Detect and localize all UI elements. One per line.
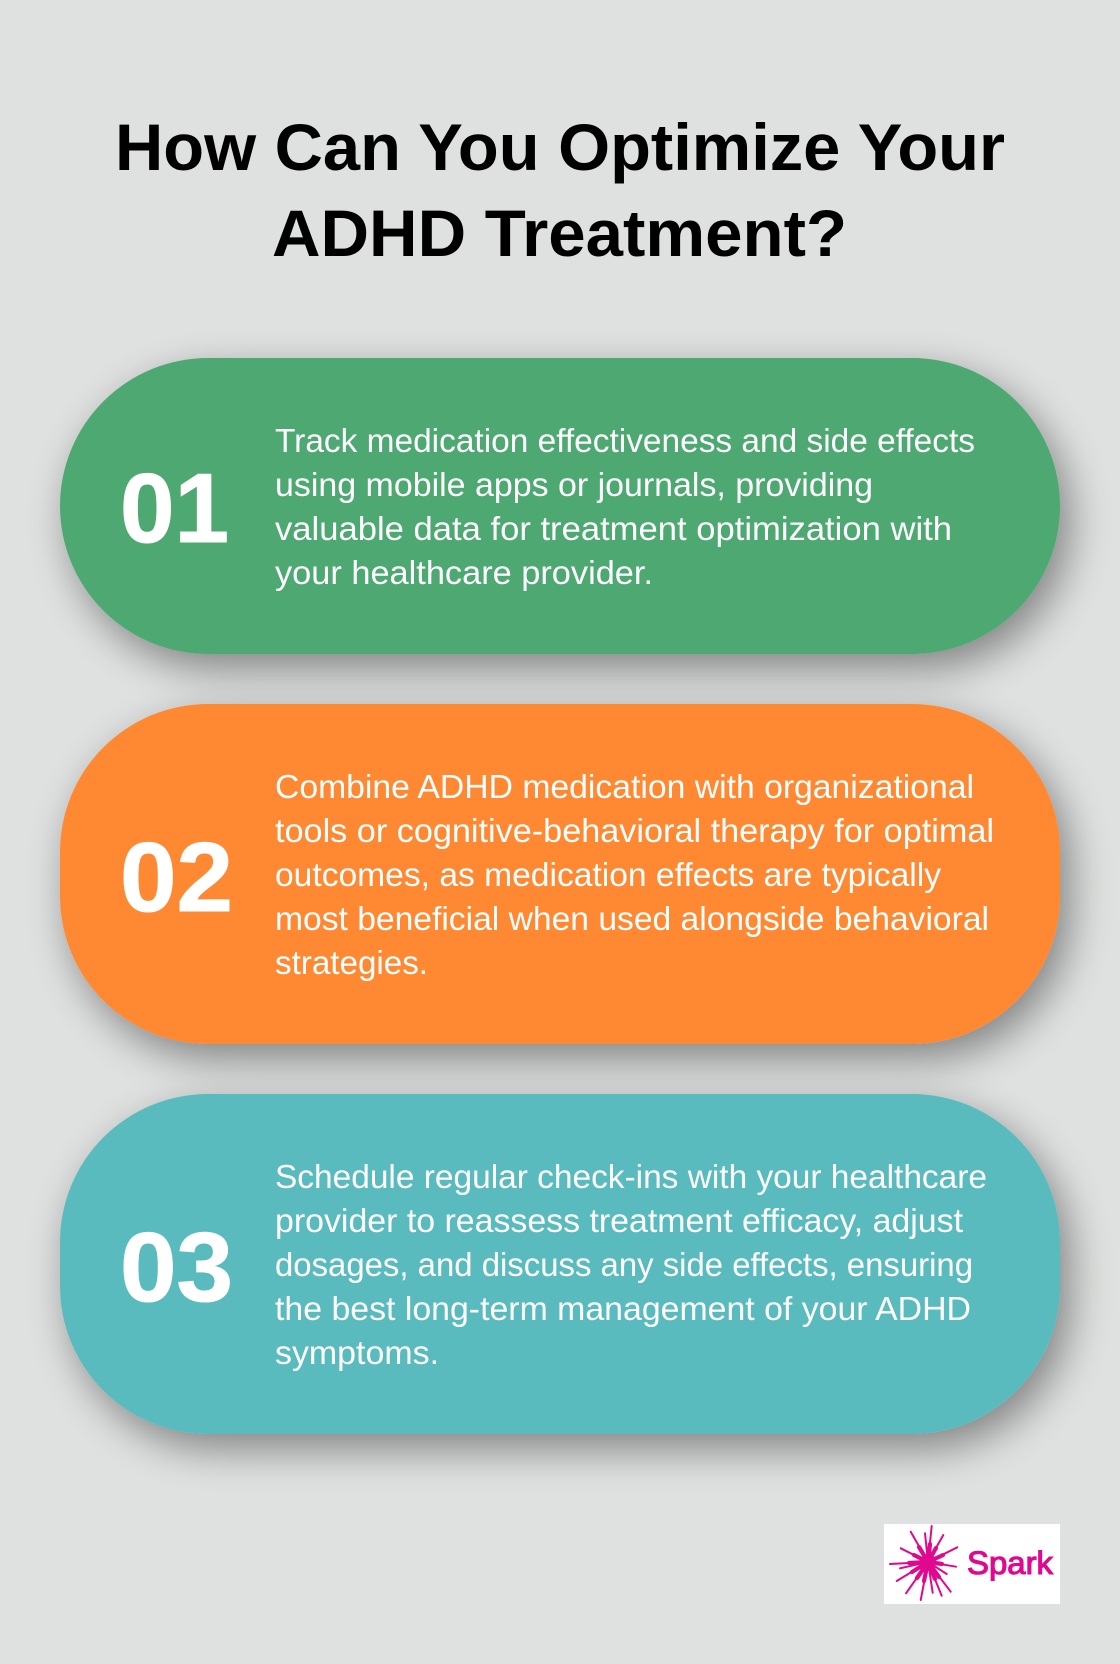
- text: step 03: the best long-term management of your ADHD: [275, 1290, 971, 1327]
- text: step 03: [275, 1158, 987, 1371]
- icon: spark star: [890, 1526, 957, 1600]
- pill: green: [60, 358, 1060, 654]
- text: step 02: tools or cognitive-behavioral therapy for optimal: [275, 812, 994, 849]
- title: ADHD Treatment?: [272, 196, 847, 270]
- title: How Can You Optimize Your: [115, 110, 1005, 184]
- text: step 01: using mobile apps or journals, providing: [275, 466, 873, 503]
- text: step 01: Track medication effectiveness and side effects: [275, 422, 975, 459]
- panel: step 01: [60, 358, 1060, 654]
- text: step 02: [275, 768, 994, 981]
- number 01: 01: [120, 453, 229, 563]
- number 03: 03: [120, 1212, 233, 1322]
- text: step 03: symptoms.: [275, 1334, 439, 1371]
- number 02: 02: [120, 822, 233, 932]
- text: step 02: Combine ADHD medication with organizational: [275, 768, 974, 805]
- text: step 01: [275, 422, 975, 591]
- pill: teal: [60, 1094, 1060, 1434]
- logo wordmark: Spark: [967, 1545, 1054, 1581]
- text: step 02: most beneficial when used alongside behavioral: [275, 900, 989, 937]
- title: [115, 110, 1005, 270]
- text: step 03: provider to reassess treatment efficacy, adjust: [275, 1202, 963, 1239]
- panel: step 02: [60, 704, 1060, 1044]
- text: step 03: Schedule regular check-ins with your healthcare: [275, 1158, 987, 1195]
- text: step 01: valuable data for treatment optimization with: [275, 510, 952, 547]
- text: step 03: dosages, and discuss any side effects, ensuring: [275, 1246, 973, 1283]
- text: step 02: outcomes, as medication effects are typically: [275, 856, 942, 893]
- text: step 02: strategies.: [275, 944, 428, 981]
- text: step 01: your healthcare provider.: [275, 554, 653, 591]
- logo: Spark: [884, 1524, 1060, 1604]
- pill: orange: [60, 704, 1060, 1044]
- panel: step 03: [60, 1094, 1060, 1434]
